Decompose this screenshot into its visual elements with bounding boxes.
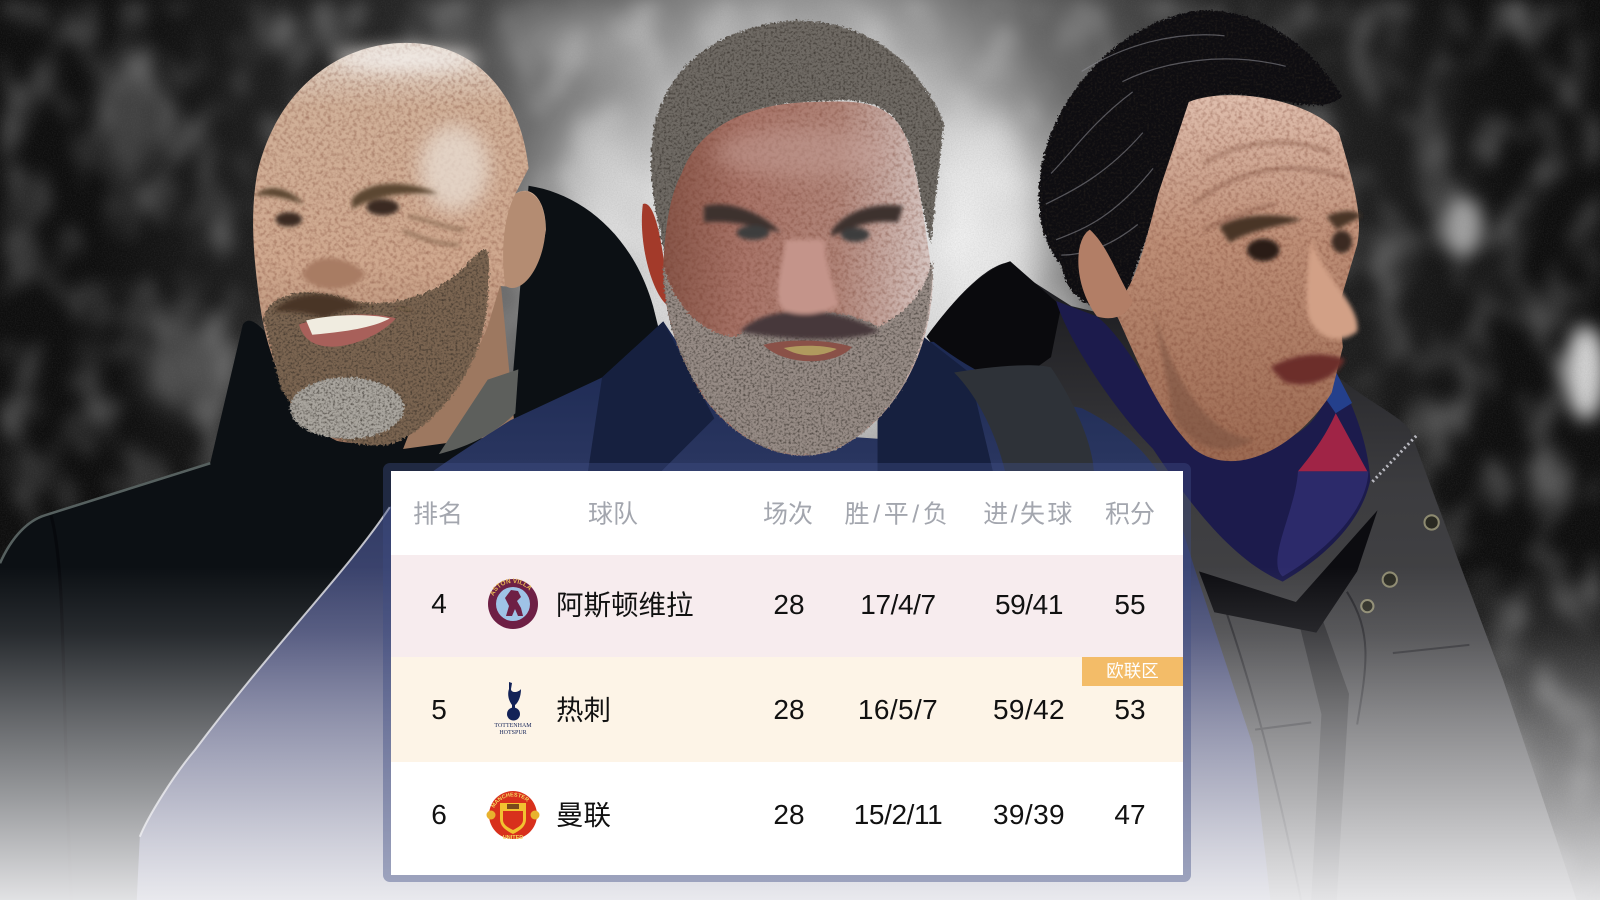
right head xyxy=(1112,95,1359,461)
right hair strands xyxy=(1046,35,1286,255)
row: Tottenham: 59/42 xyxy=(993,694,1065,725)
left head highlights xyxy=(335,49,489,211)
right scarf stripes xyxy=(1298,413,1367,471)
left neck xyxy=(403,276,515,449)
left jacket and hood xyxy=(0,186,684,900)
left facial features xyxy=(255,184,464,318)
row: Manchester United: 6 xyxy=(431,799,447,830)
table outer frame xyxy=(383,463,1191,882)
crest: Tottenham xyxy=(494,682,532,736)
right scarf xyxy=(1056,301,1370,582)
row: Tottenham: 热刺 xyxy=(556,694,611,725)
centre head xyxy=(663,102,933,455)
row: Aston Villa: 28 xyxy=(773,589,805,620)
row: Tottenham: 53 xyxy=(1114,694,1146,725)
right jacket seams and buttons xyxy=(1199,434,1469,900)
table header row: 排名 xyxy=(413,500,463,528)
manager: centre, Postecoglou xyxy=(137,20,1270,900)
table header row: 胜/平/负 xyxy=(845,500,951,528)
row: Tottenham: 28 xyxy=(773,694,805,725)
crest: Manchester United xyxy=(486,791,540,841)
right facial features xyxy=(1153,143,1361,449)
row: Aston Villa: 阿斯顿维拉 xyxy=(556,589,694,620)
centre mouth xyxy=(763,341,852,361)
backpack strap xyxy=(954,365,1094,471)
right hair xyxy=(1039,10,1342,309)
row: Aston Villa xyxy=(391,555,1183,657)
badge: Europa League zone: 欧联区 xyxy=(1106,661,1159,681)
centre hood xyxy=(587,321,995,480)
right hood xyxy=(927,261,1061,408)
centre forehead highlight xyxy=(714,129,888,178)
centre ear xyxy=(642,204,668,306)
row: Aston Villa: 4 xyxy=(431,588,447,619)
left ear xyxy=(503,192,545,288)
left jacket seam xyxy=(51,515,71,900)
centre hair xyxy=(651,20,944,255)
bottom white fade xyxy=(0,566,1600,900)
manager: right, Emery xyxy=(927,10,1577,900)
row: Manchester United xyxy=(391,762,1183,875)
row: Manchester United: 47 xyxy=(1114,799,1146,830)
badge: Europa League zone xyxy=(1082,657,1183,686)
centre arm rim xyxy=(140,507,390,837)
row: Tottenham: 5 xyxy=(431,694,447,725)
centre beard xyxy=(663,260,933,455)
right jacket xyxy=(927,263,1577,900)
left collar xyxy=(439,369,518,454)
crest: Manchester United: UNITED xyxy=(503,835,523,841)
right ear xyxy=(1078,230,1133,318)
crest: Aston Villa xyxy=(488,578,538,629)
centre jacket xyxy=(137,321,1270,900)
centre facial features xyxy=(704,204,903,339)
left beard xyxy=(263,249,489,445)
row: Aston Villa: 55 xyxy=(1114,589,1146,620)
table header row: 场次 xyxy=(763,500,813,528)
left mouth xyxy=(299,314,396,347)
row: Manchester United: 15/2/11 xyxy=(854,799,942,830)
row: Manchester United: 28 xyxy=(773,799,805,830)
table header row: 球队 xyxy=(588,500,638,528)
standings table xyxy=(391,471,1183,875)
crest: Aston Villa: ASTON VILLA xyxy=(490,578,532,596)
left shoulder rim xyxy=(0,463,210,563)
crest: Tottenham: HOTSPUR xyxy=(499,730,527,736)
row: Manchester United: 39/39 xyxy=(993,799,1065,830)
table header row xyxy=(391,471,1183,555)
manager: left, Ten Hag xyxy=(0,43,684,900)
left chin grey xyxy=(290,378,404,439)
left head xyxy=(253,43,546,443)
row: Tottenham: 16/5/7 xyxy=(858,694,938,725)
table header row: 进/失球 xyxy=(983,500,1075,528)
row: Manchester United: 曼联 xyxy=(556,799,611,830)
crest: Tottenham: TOTTENHAM xyxy=(494,723,532,729)
row: Tottenham xyxy=(391,657,1183,762)
row: Aston Villa: 17/4/7 xyxy=(860,589,936,620)
table header row: 积分 xyxy=(1105,500,1155,528)
crest: Manchester United: MANCHESTER xyxy=(491,792,529,808)
row: Aston Villa: 59/41 xyxy=(995,589,1063,620)
